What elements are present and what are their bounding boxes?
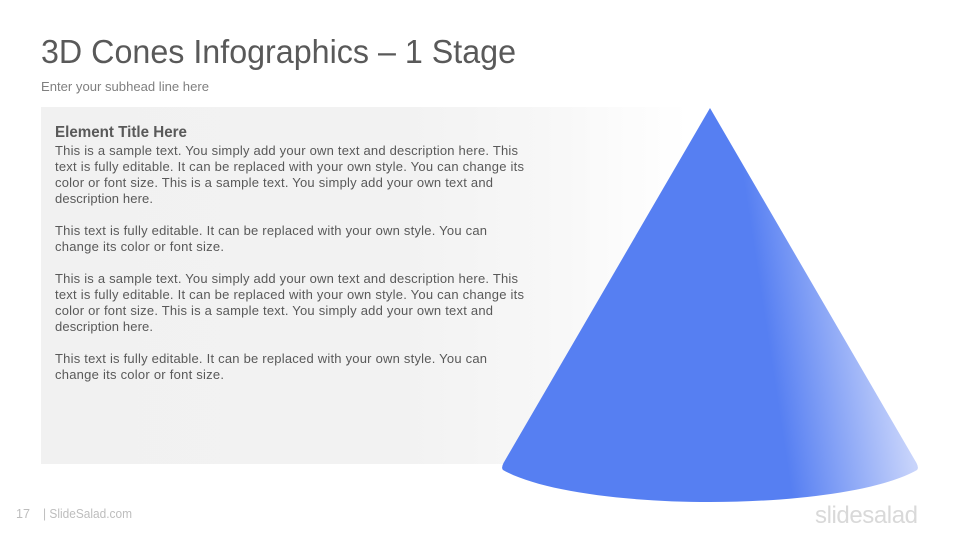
text block: element description: text is fully editable. It can be replaced with your own style. You can change its <box>55 287 524 302</box>
text block: element description: description here. <box>55 319 153 334</box>
logo: slidesalad <box>815 502 918 529</box>
text block: element description: This is a sample text. You simply add your own text and description here. This <box>55 143 518 158</box>
text block: element description: description here. <box>55 191 153 206</box>
text block: element description: change its color or font size. <box>55 239 224 254</box>
page number: 17 <box>16 507 30 521</box>
element title: Element Title Here <box>55 124 187 141</box>
text block: element description: change its color or font size. <box>55 367 224 382</box>
panel: text background <box>41 107 701 464</box>
text block: element description: This text is fully editable. It can be replaced with your own style. You can <box>55 351 487 366</box>
text block: element description: color or font size. This is a sample text. You simply add your own text and <box>55 175 493 190</box>
title: 3D Cones Infographics – 1 Stage <box>41 33 516 70</box>
text block: element description: text is fully editable. It can be replaced with your own style. You can change its <box>55 159 524 174</box>
text block: element description: This is a sample text. You simply add your own text and description here. This <box>55 271 518 286</box>
text block: element description: color or font size. This is a sample text. You simply add your own text and <box>55 303 493 318</box>
text block: element description: This text is fully editable. It can be replaced with your own style. You can <box>55 223 487 238</box>
subhead: Enter your subhead line here <box>41 79 209 94</box>
footer site name: | SlideSalad.com <box>43 507 132 521</box>
text block: element description <box>55 124 524 382</box>
icon: 3D cone <box>502 108 918 502</box>
